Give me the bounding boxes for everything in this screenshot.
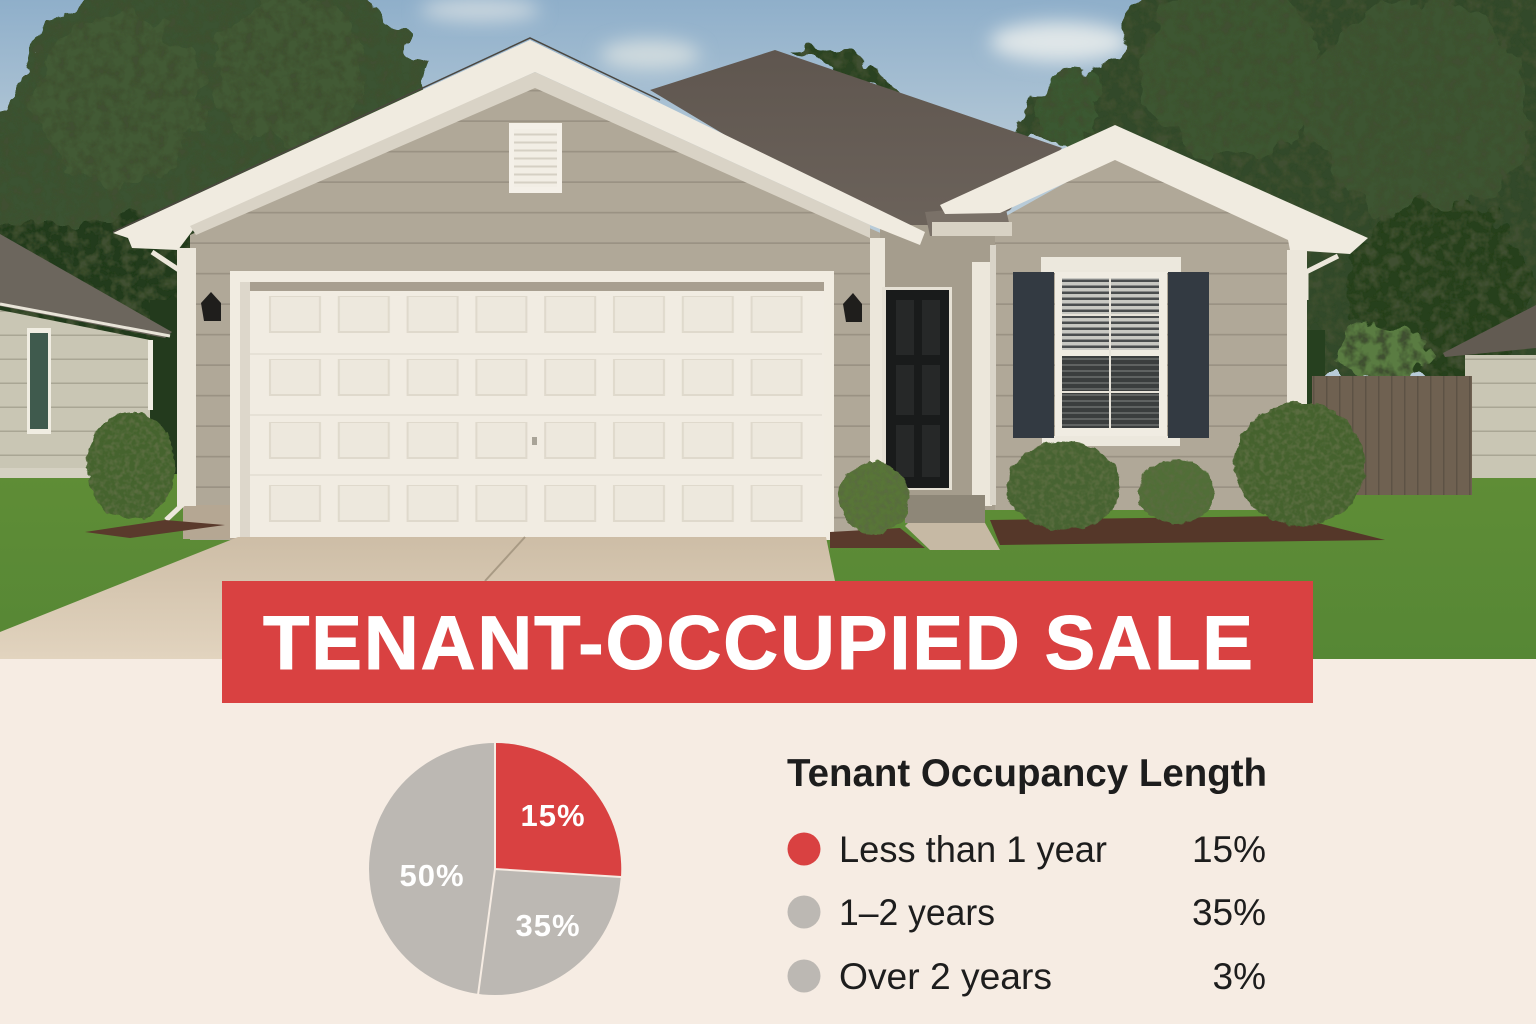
legend row: less than 1 year: Less than 1 year bbox=[839, 829, 1107, 870]
posts and trim bbox=[177, 248, 196, 506]
fence bbox=[1312, 376, 1472, 495]
right gable trim bbox=[940, 125, 1368, 254]
title banner bbox=[222, 581, 1313, 703]
legend row: 1-2 years: 1–2 years bbox=[839, 892, 995, 933]
wall lanterns bbox=[201, 292, 221, 321]
legend row: 1-2 years: 35% bbox=[1192, 892, 1266, 933]
main wall bbox=[190, 80, 885, 540]
legend bbox=[788, 829, 1266, 997]
legend heading: Tenant Occupancy Length bbox=[787, 752, 1267, 795]
photo: house exterior bbox=[0, 0, 1536, 660]
shrubs bbox=[87, 402, 1365, 534]
legend row: less than 1 year: 15% bbox=[1192, 829, 1266, 870]
vent bbox=[509, 123, 562, 193]
pie label 35%: 35% bbox=[515, 908, 581, 943]
title text: TENANT-OCCUPIED SALE bbox=[263, 601, 1253, 686]
entry recess bbox=[880, 225, 995, 510]
front door bbox=[882, 287, 952, 490]
pie label 50%: 50% bbox=[399, 858, 465, 893]
legend row: over 2 years: Over 2 years bbox=[839, 956, 1052, 997]
pie chart bbox=[369, 743, 621, 995]
window with shutters bbox=[1013, 257, 1209, 446]
lower panel background bbox=[0, 659, 1536, 1024]
driveway bbox=[0, 537, 835, 660]
legend row: over 2 years: 3% bbox=[1213, 956, 1266, 997]
garage door bbox=[230, 271, 834, 540]
legend row: 1-2 years bbox=[788, 892, 1266, 933]
right wing wall bbox=[990, 155, 1300, 510]
right roof behind bbox=[650, 50, 1062, 250]
legend row: over 2 years bbox=[788, 956, 1266, 997]
neighbouring house left bbox=[0, 234, 172, 478]
neighbouring house right bbox=[1443, 305, 1536, 478]
legend row: less than 1 year bbox=[788, 829, 1266, 870]
mulch bed bbox=[830, 528, 925, 548]
foundation bbox=[183, 505, 243, 539]
walkway and step bbox=[905, 523, 1000, 550]
main gable trim bbox=[113, 40, 925, 250]
pie label 15%: 15% bbox=[520, 798, 586, 833]
